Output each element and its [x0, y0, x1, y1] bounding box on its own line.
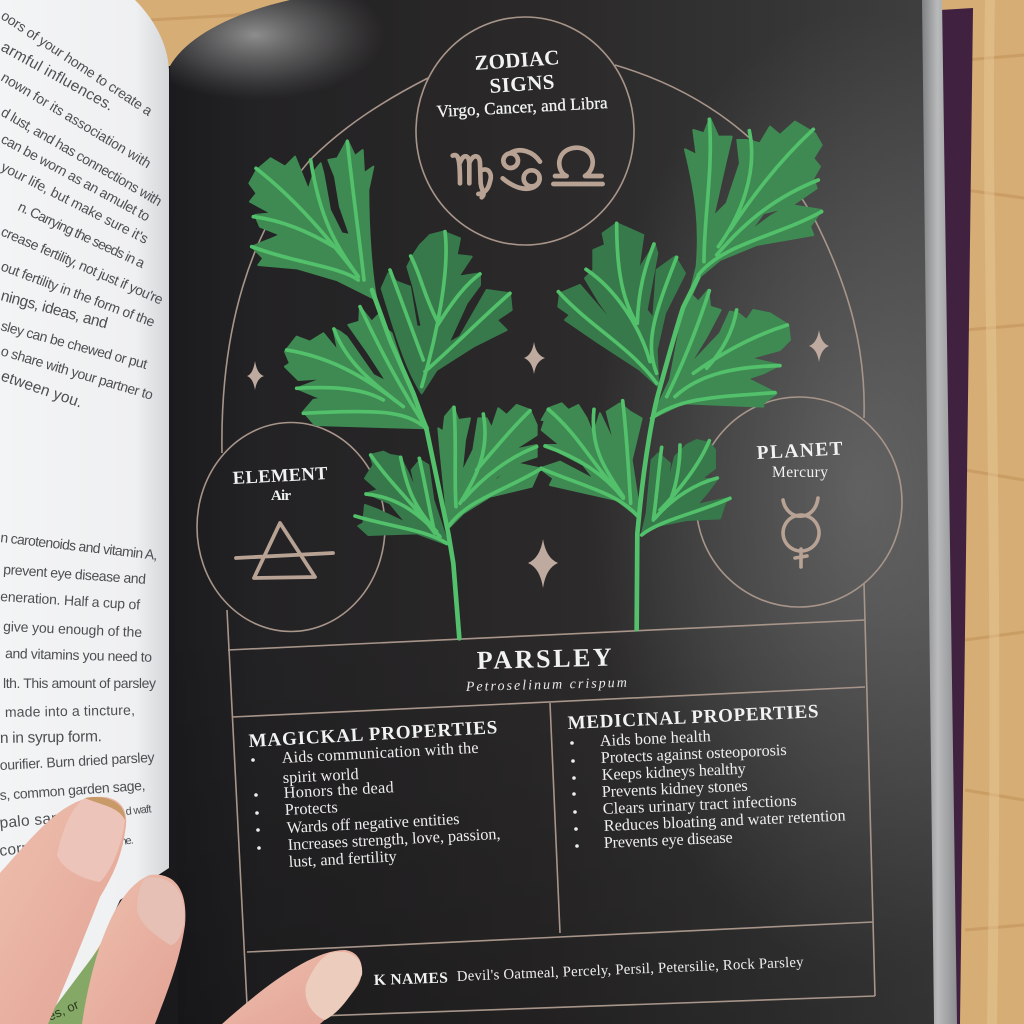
left page text: upper block: nings, ideas, and: [0, 287, 110, 332]
left page text: upper block: can be worn as an amulet to: [0, 131, 153, 224]
list text: Wards off negative entities: [286, 809, 460, 837]
frond: lower right: [438, 405, 542, 528]
bullets: [251, 758, 261, 850]
gutter under fingers: [100, 66, 184, 1024]
green image on left page: [42, 925, 130, 1024]
list text: Increases strength, love, passion,: [287, 824, 501, 854]
left page text: upper block: n. Carrying the seeds in a: [16, 198, 148, 271]
list text: Prevents eye disease: [603, 827, 733, 852]
bullets: [570, 741, 579, 848]
panel: medicinal properties: [567, 701, 846, 852]
list text: Keeps kidneys healthy: [601, 759, 747, 784]
list text: lust, and fertility: [288, 846, 398, 871]
zodiac symbols: [453, 148, 603, 197]
element name: Air: [271, 488, 291, 504]
left page text: lower block: [0, 529, 158, 860]
list text: Honors the dead: [283, 777, 394, 802]
frond: middle right: [382, 232, 512, 393]
left page text: upper block: o share with your partner to: [0, 343, 155, 403]
frond: middle left: [558, 223, 685, 387]
left page text: upper block: sley can be chewed or put: [0, 317, 149, 372]
left page text: lower block: n carotenoids and vitamin A,: [0, 529, 158, 563]
list text: Clears urinary tract infections: [602, 791, 797, 818]
heading: MEDICINAL PROPERTIES: [567, 701, 819, 734]
left page text: upper block: d lust, and has connections with: [0, 104, 165, 209]
zodiac circle: [416, 17, 634, 245]
folk names heading: K NAMES: [374, 969, 448, 989]
caption fragment on green image: es, or: [45, 997, 82, 1024]
left page text: lower block: s, common garden sage,: [0, 777, 146, 803]
list text: Protects against osteoporosis: [600, 740, 787, 767]
left page text: lower block: palo sant: [0, 809, 66, 832]
left white page: [0, 0, 169, 1024]
left page text: lower block: ne.: [120, 834, 134, 848]
frond: middle right: [652, 290, 790, 418]
folk names list: Devil's Oatmeal, Percely, Persil, Petersilie, Rock Parsley: [456, 954, 804, 985]
list text: spirit world: [282, 764, 359, 787]
left page text: lower block: prevent eye disease and: [3, 561, 147, 587]
left page text: lower block: ourifier. Burn dried parsley: [0, 749, 155, 773]
stem: [637, 277, 698, 629]
plant name: PARSLEY: [476, 642, 612, 675]
left page text: lower block: d waft: [125, 803, 152, 818]
list text: Aids communication with the: [281, 738, 479, 767]
element heading: ELEMENT: [232, 464, 329, 489]
left page text: upper block: out fertility in the form of the: [0, 258, 157, 330]
zodiac names: Virgo, Cancer, and Libra: [436, 93, 608, 121]
frond: middle left: [285, 307, 428, 428]
hand: middle finger: [82, 875, 185, 1024]
list text: [599, 726, 846, 852]
right parsley plant: [540, 118, 822, 629]
left page text: upper block: armful influences.: [0, 39, 117, 115]
left page text: lower block: n in syrup form.: [0, 728, 102, 747]
heading: MAGICKAL PROPERTIES: [248, 717, 498, 752]
zodiac heading second line: SIGNS: [489, 70, 555, 98]
icon: mercury symbol: [783, 498, 819, 567]
title panel: [465, 642, 627, 695]
left page text: lower block: eneration. Half a cup of: [0, 588, 141, 613]
left page text: lower block: made into a tincture,: [5, 702, 135, 720]
left page text: upper block: etween you.: [0, 368, 85, 411]
list text: Aids bone health: [599, 726, 711, 750]
frond: upper left: [249, 140, 377, 300]
frond: lower left: [355, 452, 448, 545]
panel: magickal properties: [248, 717, 501, 871]
left page text: upper block: crease fertility, not just if you're: [0, 223, 166, 308]
left page text: lower block: and vitamins you need to: [5, 645, 152, 665]
list text: Protects: [284, 797, 338, 819]
latin name: Petroselinum crispum: [465, 676, 627, 695]
planet circle: [696, 397, 902, 607]
book cover purple edge: [940, 8, 973, 1024]
planet heading: PLANET: [756, 439, 843, 464]
list text: Prevents kidney stones: [601, 776, 748, 801]
stem: [372, 290, 459, 638]
left parsley plant: [249, 140, 542, 638]
frond: lower right: [642, 440, 730, 535]
icon: air symbol: [236, 523, 333, 578]
left page text: lower block: lth. This amount of parsley: [3, 675, 156, 691]
frond: lower left: [540, 401, 642, 518]
planet name: Mercury: [772, 464, 828, 481]
frond: upper top: [685, 118, 822, 307]
list text: Reduces bloating and water retention: [603, 805, 846, 835]
folk names panel: [374, 954, 804, 989]
zodiac heading: ZODIAC: [474, 45, 560, 75]
hand: index finger: [0, 797, 126, 1024]
sparkles: [247, 330, 829, 588]
hand: thumb: [222, 950, 362, 1024]
list text: [281, 738, 501, 871]
element circle: [197, 422, 385, 632]
left page text: upper block: [0, 7, 166, 411]
left page text: lower block: give you enough of the: [3, 618, 143, 640]
dark right page: [170, 0, 934, 1024]
left page text: upper block: oors of your home to create a: [0, 7, 156, 119]
left page text: upper block: nown for its association with: [0, 69, 154, 171]
frame lines: [222, 65, 875, 1024]
left page text: upper block: your life, but make sure it's: [0, 158, 151, 247]
page block edge: [918, 0, 957, 1024]
